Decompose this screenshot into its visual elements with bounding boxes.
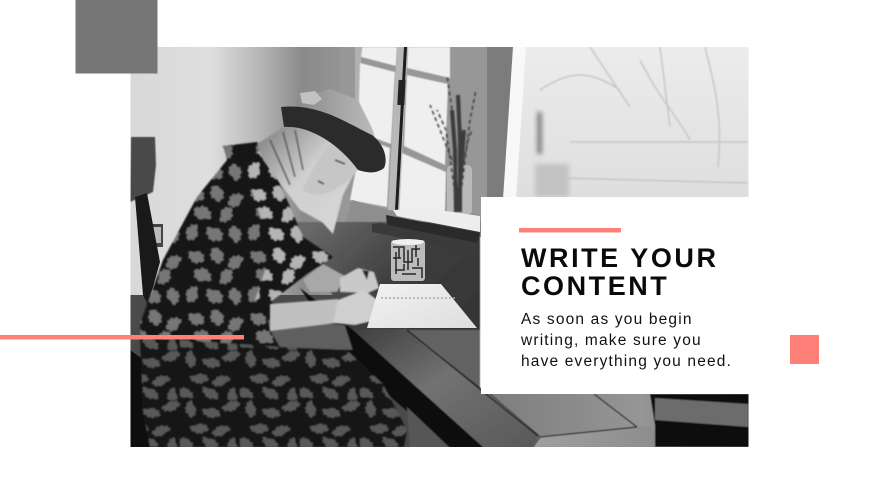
- text card: [481, 197, 749, 394]
- outside window view: [503, 47, 750, 199]
- coral square: [790, 335, 819, 364]
- heading: CONTENT: [521, 271, 669, 301]
- coral line: [0, 335, 244, 340]
- floor: [130, 295, 430, 450]
- body text: have everything you need.: [521, 353, 732, 370]
- coral accent bar: [519, 228, 621, 232]
- faint branches: [540, 47, 748, 183]
- window frame right: [503, 47, 526, 199]
- hat: [281, 89, 386, 172]
- body text: As soon as you begin: [521, 311, 693, 328]
- window sill: [346, 200, 480, 222]
- wall: [130, 47, 340, 295]
- floor tiles: [407, 407, 450, 448]
- gray square: [76, 0, 158, 74]
- outlet: [152, 224, 163, 247]
- lower right floor and books: [487, 394, 748, 447]
- heading: WRITE YOUR: [521, 243, 719, 273]
- chair: [130, 137, 165, 447]
- arms and hands: [270, 264, 380, 331]
- table plank front: [352, 329, 538, 448]
- notebook: [367, 284, 477, 328]
- hair and face: [257, 125, 362, 234]
- dress: [140, 142, 407, 447]
- body text: writing, make sure you: [520, 332, 702, 349]
- table edge: [300, 288, 484, 448]
- table plank right: [407, 330, 540, 448]
- vase with dried plant: [430, 75, 476, 215]
- photo: woman writing at a table: [130, 47, 750, 450]
- window wall: [370, 47, 513, 237]
- window mullion: [388, 47, 408, 210]
- window panes: [350, 47, 450, 212]
- table: [296, 222, 540, 448]
- books: [372, 210, 480, 243]
- mug: [391, 239, 425, 281]
